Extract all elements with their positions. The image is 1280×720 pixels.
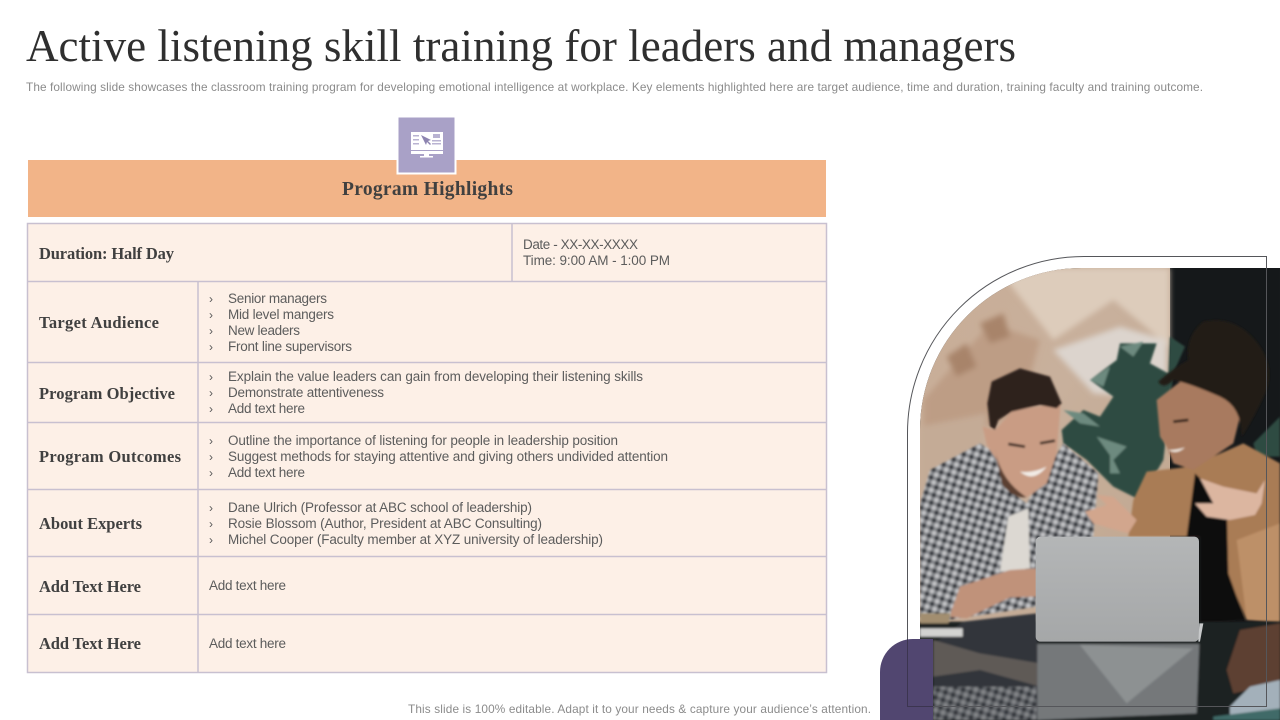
row: target audience: › bbox=[209, 340, 213, 354]
row: about experts bbox=[39, 500, 603, 547]
row: program outcomes: › bbox=[209, 434, 213, 448]
man arm bbox=[949, 568, 1037, 618]
footer note: This slide is 100% editable. Adapt it to your needs & capture your audience’s attention. bbox=[408, 702, 871, 716]
row: duration: Time: 9:00 AM - 1:00 PM bbox=[523, 253, 670, 268]
row: program outcomes bbox=[39, 433, 668, 480]
row: program outcomes: Program Outcomes bbox=[39, 447, 182, 466]
title: Active listening skill training for leaders and managers bbox=[26, 21, 1016, 71]
row: program objective: Program Objective bbox=[39, 384, 175, 403]
row: about experts: Michel Cooper (Faculty member at XYZ university of leadership) bbox=[228, 532, 603, 547]
row: about experts: › bbox=[209, 533, 213, 547]
row: add text one bbox=[39, 577, 286, 596]
row: about experts: › bbox=[209, 517, 213, 531]
row: add text two: Add text here bbox=[209, 636, 286, 651]
row: add text two bbox=[39, 634, 286, 653]
row: program objective: › bbox=[209, 402, 213, 416]
woman top bbox=[1187, 473, 1245, 623]
row: program objective: › bbox=[209, 386, 213, 400]
man head bbox=[983, 403, 1061, 497]
row: program outcomes: Add text here bbox=[228, 465, 305, 480]
row: program objective: Add text here bbox=[228, 401, 305, 416]
row: target audience: Front line supervisors bbox=[228, 339, 352, 354]
row: target audience: Senior managers bbox=[228, 291, 327, 306]
row: target audience: New leaders bbox=[228, 323, 300, 338]
woman jacket bbox=[1128, 443, 1280, 623]
laptop reflection bbox=[1037, 644, 1199, 720]
panel: program table bbox=[27, 223, 827, 672]
hands bbox=[1085, 495, 1137, 533]
photo: two colleagues at a laptop bbox=[913, 260, 1280, 720]
row: target audience: › bbox=[209, 308, 213, 322]
row: about experts: Dane Ulrich (Professor at ABC school of leadership) bbox=[228, 500, 532, 515]
accent block: purple bbox=[880, 639, 933, 720]
row: add text one: Add Text Here bbox=[39, 577, 141, 596]
row: about experts: › bbox=[209, 501, 213, 515]
row: program objective: Demonstrate attentiveness bbox=[228, 385, 384, 400]
icon: computer monitor with cursor bbox=[398, 116, 456, 174]
row: program objective: Explain the value leaders can gain from developing their listening skills bbox=[228, 369, 643, 384]
plant bbox=[1062, 337, 1280, 500]
row: program outcomes: › bbox=[209, 466, 213, 480]
row: program objective bbox=[39, 369, 643, 416]
row: target audience: Target Audience bbox=[39, 313, 159, 332]
man and woman bbox=[920, 320, 1280, 623]
man shirt bbox=[920, 443, 1098, 620]
row: program outcomes: Outline the importance of listening for people in leadership position bbox=[228, 433, 618, 448]
row: about experts: About Experts bbox=[39, 514, 143, 533]
heading: program highlights: Program Highlights bbox=[342, 179, 513, 200]
row: add text one: Add text here bbox=[209, 578, 286, 593]
row: add text two: Add Text Here bbox=[39, 634, 141, 653]
row: program outcomes: Suggest methods for staying attentive and giving others undivided attention bbox=[228, 449, 668, 464]
row: program outcomes: › bbox=[209, 450, 213, 464]
woman hair bbox=[1158, 320, 1269, 437]
row: about experts: Rosie Blossom (Author, President at ABC Consulting) bbox=[228, 516, 542, 531]
subtitle: The following slide showcases the classroom training program for developing emotional intelligence at workplace. Key elements highlighted here are target audience, time and duration, training faculty and training outcome. bbox=[26, 80, 1203, 94]
laptop bbox=[1036, 537, 1199, 642]
row: target audience bbox=[39, 291, 352, 354]
row: program objective: › bbox=[209, 370, 213, 384]
row: target audience: › bbox=[209, 292, 213, 306]
man t-shirt bbox=[1000, 508, 1030, 572]
row: target audience: › bbox=[209, 324, 213, 338]
frame line over accent block bbox=[908, 639, 933, 706]
row: duration bbox=[39, 237, 670, 268]
panel: program highlights header bbox=[28, 160, 826, 217]
table bbox=[913, 613, 1280, 720]
frame line around photo bbox=[908, 256, 1266, 706]
row: duration: Date - XX-XX-XXXX bbox=[523, 237, 638, 252]
notebook bbox=[920, 613, 951, 623]
row: target audience: Mid level mangers bbox=[228, 307, 334, 322]
row: duration: Duration: Half Day bbox=[39, 244, 175, 263]
woman head bbox=[1157, 377, 1242, 470]
